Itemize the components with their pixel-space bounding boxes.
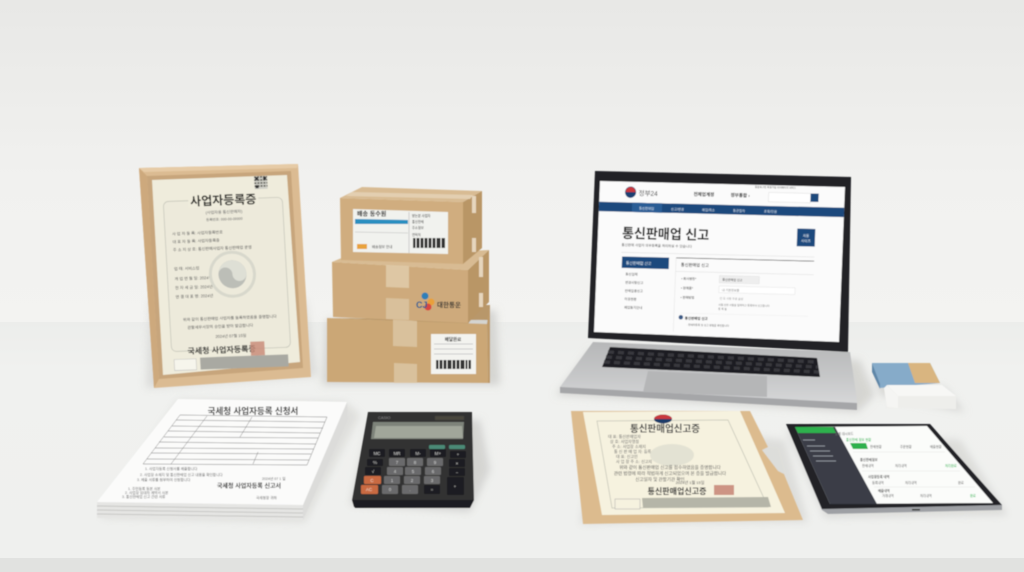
calculator keys: 6 bbox=[432, 469, 435, 474]
form title: 국세청 사업자등록 신청서 bbox=[208, 406, 298, 416]
tablet screen: 판매현황 bbox=[870, 444, 882, 449]
calculator keys: − bbox=[456, 470, 459, 475]
form notes: 3. 제출 서류를 첨부하여 신청합니다 bbox=[137, 477, 191, 482]
certificate content: 주 소 지 상 호: 통신판매사업자 통신판매업 운영 bbox=[173, 243, 252, 252]
calculator keys: AC bbox=[366, 487, 373, 492]
registration form: 등 록 됨 bbox=[718, 307, 727, 311]
QR code bbox=[254, 176, 268, 189]
calculator bbox=[350, 412, 490, 512]
shipping label: 배송 동수원 bbox=[357, 210, 387, 218]
form notes: 2024년 07 1 일 bbox=[262, 476, 286, 481]
form notes: 국세청 사업자등록 신고서 bbox=[217, 482, 281, 490]
help button: 사이즈 bbox=[801, 238, 812, 243]
tablet screen: 통신판매 정보 현황 bbox=[846, 437, 871, 442]
tablet screen: 처리내역 bbox=[895, 463, 907, 468]
display bbox=[371, 422, 464, 439]
certificate content: 개 업 연 월 일: 2024년 bbox=[174, 274, 213, 281]
certificate sheet: 주 소: 사업장 소재지 bbox=[612, 443, 646, 449]
certificate sheet: 위와 같이 통신판매업 신고를 접수하였음을 증명합니다 bbox=[619, 464, 722, 471]
laptop bezel bbox=[588, 171, 851, 352]
certificate content: 사 업 자 등 록: 사업자등록번호 bbox=[172, 228, 223, 236]
certificate content: 전 자 세 금 일: 2024년 bbox=[175, 283, 213, 290]
emblem bbox=[654, 414, 672, 424]
certificate content: 관할세무서장의 승인을 받아 발급합니다 bbox=[187, 322, 254, 330]
shipping label: 통신판매 bbox=[412, 219, 424, 224]
laptop screen: 통신판매 사업자 의무등록을 처리하실 수 있습니다 bbox=[621, 242, 693, 249]
manila folder with mail-order certificate bbox=[571, 411, 808, 524]
calculator keys: √ bbox=[372, 469, 375, 474]
navigation bar bbox=[599, 202, 844, 217]
calculator keys: 4 bbox=[394, 469, 397, 474]
tablet screen: 처리내역 bbox=[905, 480, 917, 485]
calculator keys bbox=[361, 445, 466, 495]
shipping label bbox=[353, 209, 448, 254]
shipping label: 주소정보 bbox=[412, 225, 424, 230]
certificate sheet: 2024년 1월 15일 bbox=[676, 479, 705, 485]
certificate sheet: 통 신 판 매 업 자: 등록 bbox=[614, 448, 652, 454]
tablet screen: 등록내역 bbox=[872, 480, 884, 485]
form notes: 2. 사업장 소재지 및 통신판매업 신고 내용을 확인합니다 bbox=[140, 472, 223, 477]
certificate content: 연 결 대 표 명: 2024년 bbox=[175, 292, 214, 299]
folder bbox=[571, 411, 803, 524]
side menu bbox=[620, 256, 669, 311]
certificate content: (사업자용 통신판매자) bbox=[205, 208, 243, 215]
calculator keys: × bbox=[456, 461, 459, 466]
calculator keys: 9 bbox=[434, 460, 437, 465]
certificate sheet: 대 표: 신고인 bbox=[616, 453, 638, 459]
box: middle with logo bbox=[332, 250, 489, 323]
tablet screen: 완료 bbox=[958, 480, 964, 485]
navigation bar: 폐업/취소 bbox=[702, 207, 715, 212]
registration form: 전 요 사항 주류 술상 bbox=[720, 296, 744, 301]
page title: 통신판매업 신고 bbox=[622, 226, 710, 243]
side menu: 폐업통지안내 bbox=[624, 305, 642, 310]
registration form: • 판매방법 bbox=[681, 294, 694, 300]
green header bbox=[795, 427, 836, 433]
form notes bbox=[122, 466, 286, 500]
certificate sheet: 상 호: 사업자명칭 bbox=[610, 438, 639, 444]
tablet screen: 통신판매정보 bbox=[860, 457, 878, 462]
box: bottom: 배달완료 bbox=[445, 336, 461, 343]
certificate content: 2024년 07월 15일 bbox=[215, 332, 247, 339]
sidebar bbox=[795, 427, 877, 504]
help button: 자동 bbox=[803, 233, 810, 238]
calculator keys: = bbox=[431, 487, 434, 492]
side menu: 통신업체 bbox=[625, 271, 638, 277]
form notes: 1. 주민등록 등본 사본 bbox=[128, 486, 161, 491]
registration form: · 판매자등록 및 신고 방법을 확인합니다 bbox=[686, 323, 730, 328]
tablet screen: 처리완료 bbox=[945, 463, 957, 468]
calculator keys: + bbox=[457, 452, 460, 457]
calculator keys: % bbox=[373, 460, 377, 465]
calculator keys: 7 bbox=[396, 460, 399, 465]
shipping label: 연락처 bbox=[412, 232, 421, 237]
certificate content: 등록번호: 000-00-00000 bbox=[206, 216, 243, 222]
side menu: 이용현황 bbox=[624, 296, 637, 302]
CJ logo: 대한통운 bbox=[437, 300, 461, 309]
tablet screen: 처리내역 bbox=[920, 493, 932, 498]
calculator keys: + bbox=[454, 484, 457, 489]
registration form: 통신판매업 신고 bbox=[681, 261, 709, 269]
tablet screen: 거래내역 bbox=[882, 493, 894, 498]
registration form: • 판매품* bbox=[681, 285, 694, 290]
navigation bar: 통관절차 bbox=[733, 208, 745, 213]
certificate sheet: 통신판매업신고증 bbox=[648, 486, 707, 496]
registration form: 내 기본정보를 bbox=[722, 287, 740, 293]
calculator keys: MC bbox=[374, 451, 381, 456]
registration form: • 회사명칭* bbox=[681, 276, 697, 281]
calculator keys: 8 bbox=[414, 460, 417, 465]
certificate content: 대 표 자 등 록: 사업자등록증 bbox=[172, 237, 220, 244]
navigation bar: 조회/민원 bbox=[764, 209, 777, 214]
dashboard rows bbox=[850, 443, 868, 449]
navigation bar: 통신판매업 bbox=[639, 205, 654, 211]
certificate content: 위와 같이 통신판매업 사업자를 등록하였음을 증명합니다 bbox=[183, 313, 277, 322]
site header bbox=[625, 182, 819, 203]
form notes: 3. 통신판매업 신고 관련 서류 bbox=[122, 494, 166, 499]
laptop screen bbox=[594, 181, 845, 342]
certificate content: 사업자등록증 bbox=[190, 192, 257, 209]
form notes: 국세청장 귀하 bbox=[256, 495, 278, 500]
certificate sheet: 통신판매업신고증 bbox=[630, 423, 700, 435]
tablet screen: 완료 bbox=[970, 493, 976, 498]
white block bbox=[884, 385, 956, 409]
tablet screen: 주문현황 bbox=[900, 444, 912, 449]
stationery blocks bbox=[872, 363, 965, 412]
calculator keys: C bbox=[370, 478, 374, 483]
certificate sheet: 신고일자 및 관할기관 확인 bbox=[635, 476, 685, 483]
side menu: 변경사항신고 bbox=[625, 280, 643, 285]
tablet screen: 매출현황 bbox=[930, 444, 942, 449]
stack of application forms bbox=[97, 399, 360, 522]
form table bbox=[143, 415, 327, 465]
form notes: 1. 사업자등록 신청서를 제출합니다 bbox=[145, 466, 198, 471]
certificate content: 국세청 사업자등록증 bbox=[187, 344, 257, 356]
calculator keys: M+ bbox=[435, 451, 442, 456]
calculator keys: 0 bbox=[389, 487, 392, 492]
calculator keys: . bbox=[409, 487, 411, 492]
calculator keys: 1 bbox=[391, 478, 394, 483]
registration form bbox=[673, 258, 814, 335]
trackpad bbox=[643, 371, 767, 397]
certificate sheet: 대 표: 통신판매업자 bbox=[608, 433, 641, 439]
registration form: 사업 신청 사항을 입력하고 등록하여 신고합니다 bbox=[718, 303, 770, 308]
blue and tan block bbox=[872, 363, 940, 389]
framed business registration certificate bbox=[139, 164, 318, 388]
certificate sheet: 사 업 장 주 소: 신고지 bbox=[616, 458, 652, 464]
calculator keys: MR bbox=[394, 451, 401, 456]
form notes: 2. 사업장 임대차 계약서 사본 bbox=[125, 490, 169, 495]
box: top with label bbox=[340, 187, 482, 264]
laptop bbox=[556, 171, 875, 412]
laptop base bbox=[560, 342, 857, 410]
CJ logo: CJ bbox=[416, 300, 428, 310]
certificate sheet: 관련 법령에 따라 적법하게 신고되었으며 본 증을 발급합니다 bbox=[614, 470, 727, 477]
shipping label: 배송정보 안내 bbox=[372, 244, 392, 249]
registration form: 통신판매업 신고 bbox=[722, 277, 743, 282]
tablet screen: 판매내역 bbox=[862, 463, 874, 468]
keyboard bbox=[602, 347, 820, 377]
side menu: 판매업종신고 bbox=[625, 288, 643, 293]
certificate content: 업 태: 서비스업 bbox=[174, 264, 200, 271]
registration form: 통신판매업 신고 bbox=[685, 315, 709, 321]
calculator keys: M- bbox=[415, 451, 421, 456]
tablet with dashboard bbox=[786, 424, 1008, 518]
CJ logo bbox=[416, 292, 461, 310]
site header: 통합로그인 회원가입 마이페이지 서비스 bbox=[755, 185, 797, 190]
tablet screen: 매출내역 bbox=[878, 488, 890, 493]
calculator: CASIO bbox=[378, 415, 390, 420]
calculator keys: 5 bbox=[412, 469, 415, 474]
tablet screen: 사업장등록 내역 bbox=[868, 474, 889, 479]
certificate content bbox=[162, 175, 292, 371]
site header: 전체업계정 bbox=[693, 191, 714, 198]
site header: 정부24 bbox=[638, 188, 658, 198]
navigation bar: 신고/변경 bbox=[671, 206, 684, 212]
help button bbox=[797, 229, 815, 247]
calculator keys: 2 bbox=[411, 478, 414, 483]
stacked shipping boxes bbox=[322, 187, 500, 385]
shipping label: 받는분 사업자 bbox=[412, 213, 431, 218]
site header: 정부통합 › bbox=[730, 192, 750, 199]
tablet screen bbox=[795, 426, 993, 504]
side menu: 통신판매업 신고 bbox=[626, 260, 652, 266]
certificate sheet bbox=[583, 411, 785, 515]
box: bottom bbox=[327, 304, 490, 383]
calculator keys: 3 bbox=[431, 478, 434, 483]
tablet screen: 통계 대시보드 bbox=[835, 431, 854, 436]
